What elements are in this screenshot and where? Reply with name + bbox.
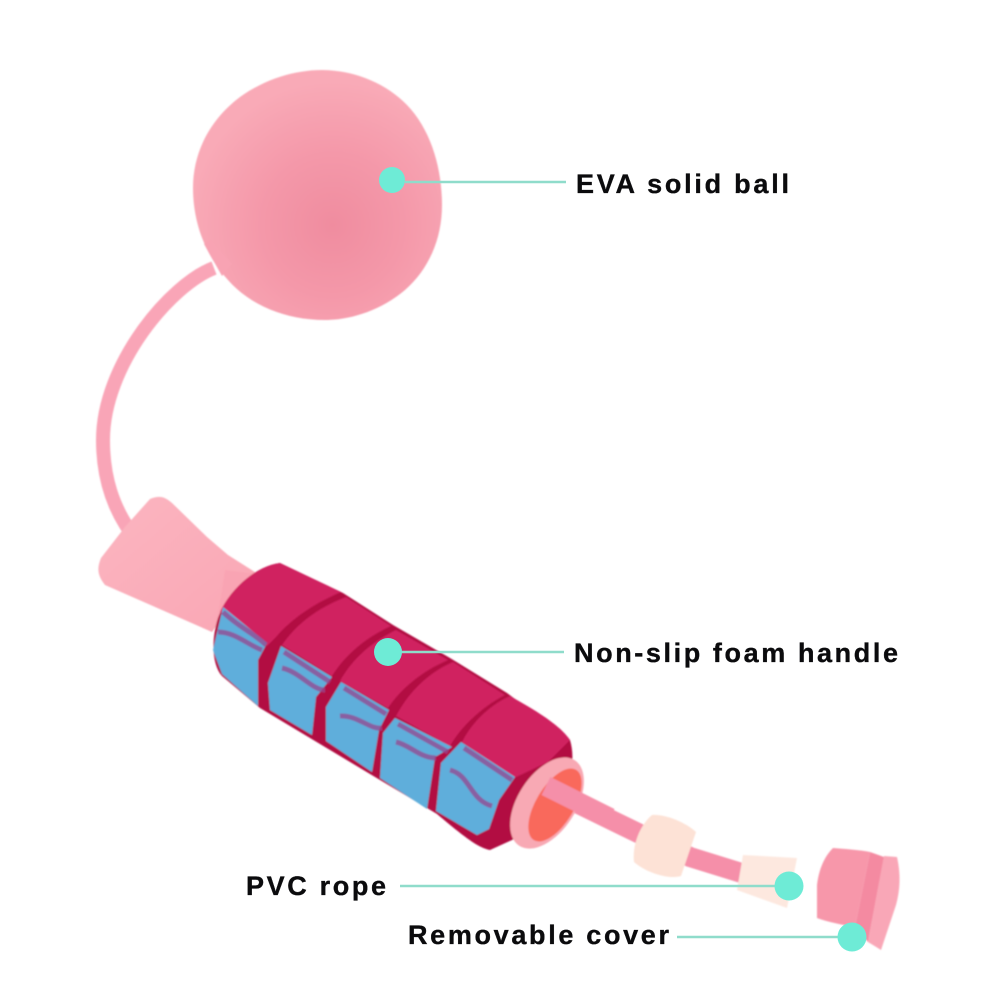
callout: PVC rope: PVC rope	[246, 871, 386, 901]
rope inside handle	[546, 786, 610, 818]
EVA ball	[193, 70, 442, 320]
callout: EVA solid ball: EVA solid ball	[576, 169, 789, 199]
cone grip end	[98, 497, 258, 632]
ball collar	[204, 240, 232, 276]
cover groove	[855, 852, 884, 942]
jump rope product	[98, 70, 900, 950]
callout: foam handle	[374, 638, 898, 668]
cream bead	[634, 815, 696, 877]
handle neck	[215, 570, 258, 635]
marbling between crimson and blue	[218, 612, 512, 806]
foam handle base	[213, 563, 572, 850]
callout: foam handle: Non-slip foam handle	[574, 638, 898, 668]
handle end collar	[495, 744, 599, 862]
handle opening	[518, 760, 592, 850]
rope end connector	[737, 855, 797, 908]
handle segments: crimson tops	[220, 563, 570, 778]
handle segments: blue sides	[213, 607, 515, 835]
rope	[550, 790, 790, 888]
callout: EVA solid ball	[379, 167, 789, 199]
callout: PVC rope	[246, 871, 804, 901]
curved rope tail	[103, 268, 214, 534]
callout: removable cover	[408, 920, 866, 952]
cover flange	[868, 856, 900, 950]
removable cover body	[817, 848, 870, 927]
callout: removable cover: Removable cover	[408, 920, 669, 950]
